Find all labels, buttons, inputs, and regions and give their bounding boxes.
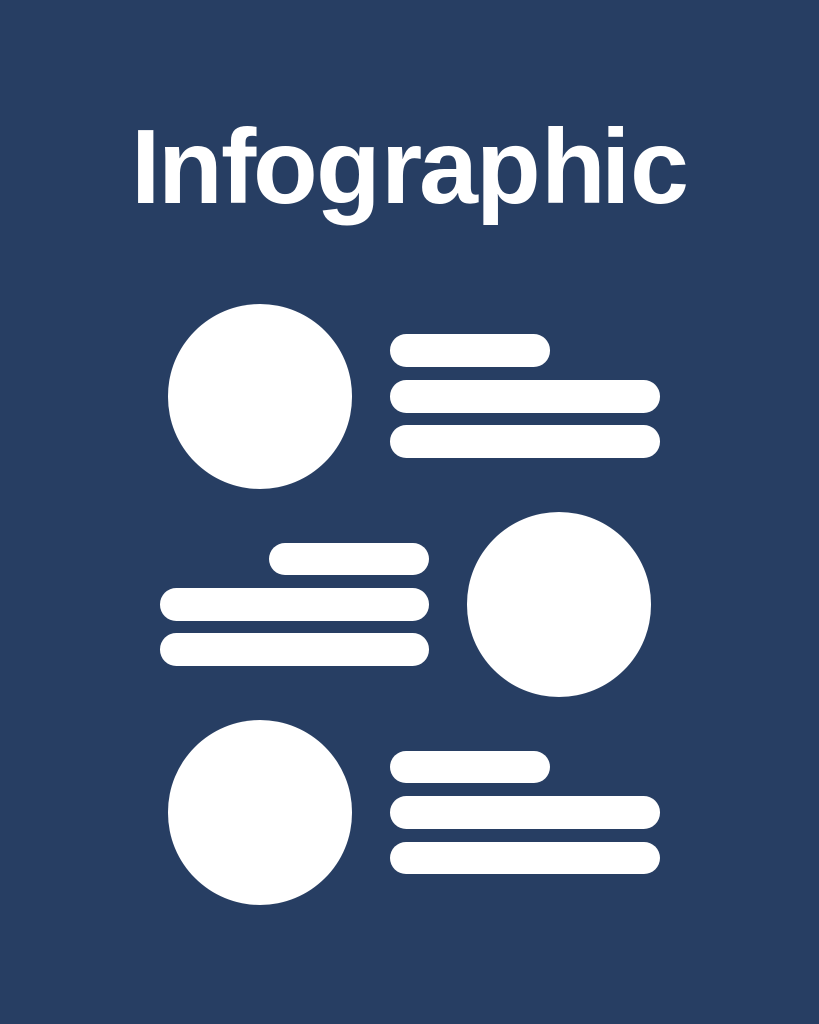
title: Infographic — [131, 108, 689, 226]
text bar 3c — [390, 842, 660, 874]
icon circle 1 — [168, 304, 352, 489]
text bar 1b — [390, 380, 660, 413]
text bar 2c — [160, 633, 429, 666]
text bar 1a — [390, 334, 550, 367]
text bar 2b — [160, 588, 429, 621]
text bar 3b — [390, 796, 660, 829]
text bar 3a — [390, 751, 550, 783]
text bar 2a — [269, 543, 429, 575]
row 1: circle and text bars — [168, 304, 660, 489]
row 3: circle and text bars — [168, 720, 660, 905]
icon circle 3 — [168, 720, 352, 905]
row 2: text bars and circle — [160, 512, 651, 697]
text bar 1c — [390, 425, 660, 458]
icon circle 2 — [467, 512, 651, 697]
